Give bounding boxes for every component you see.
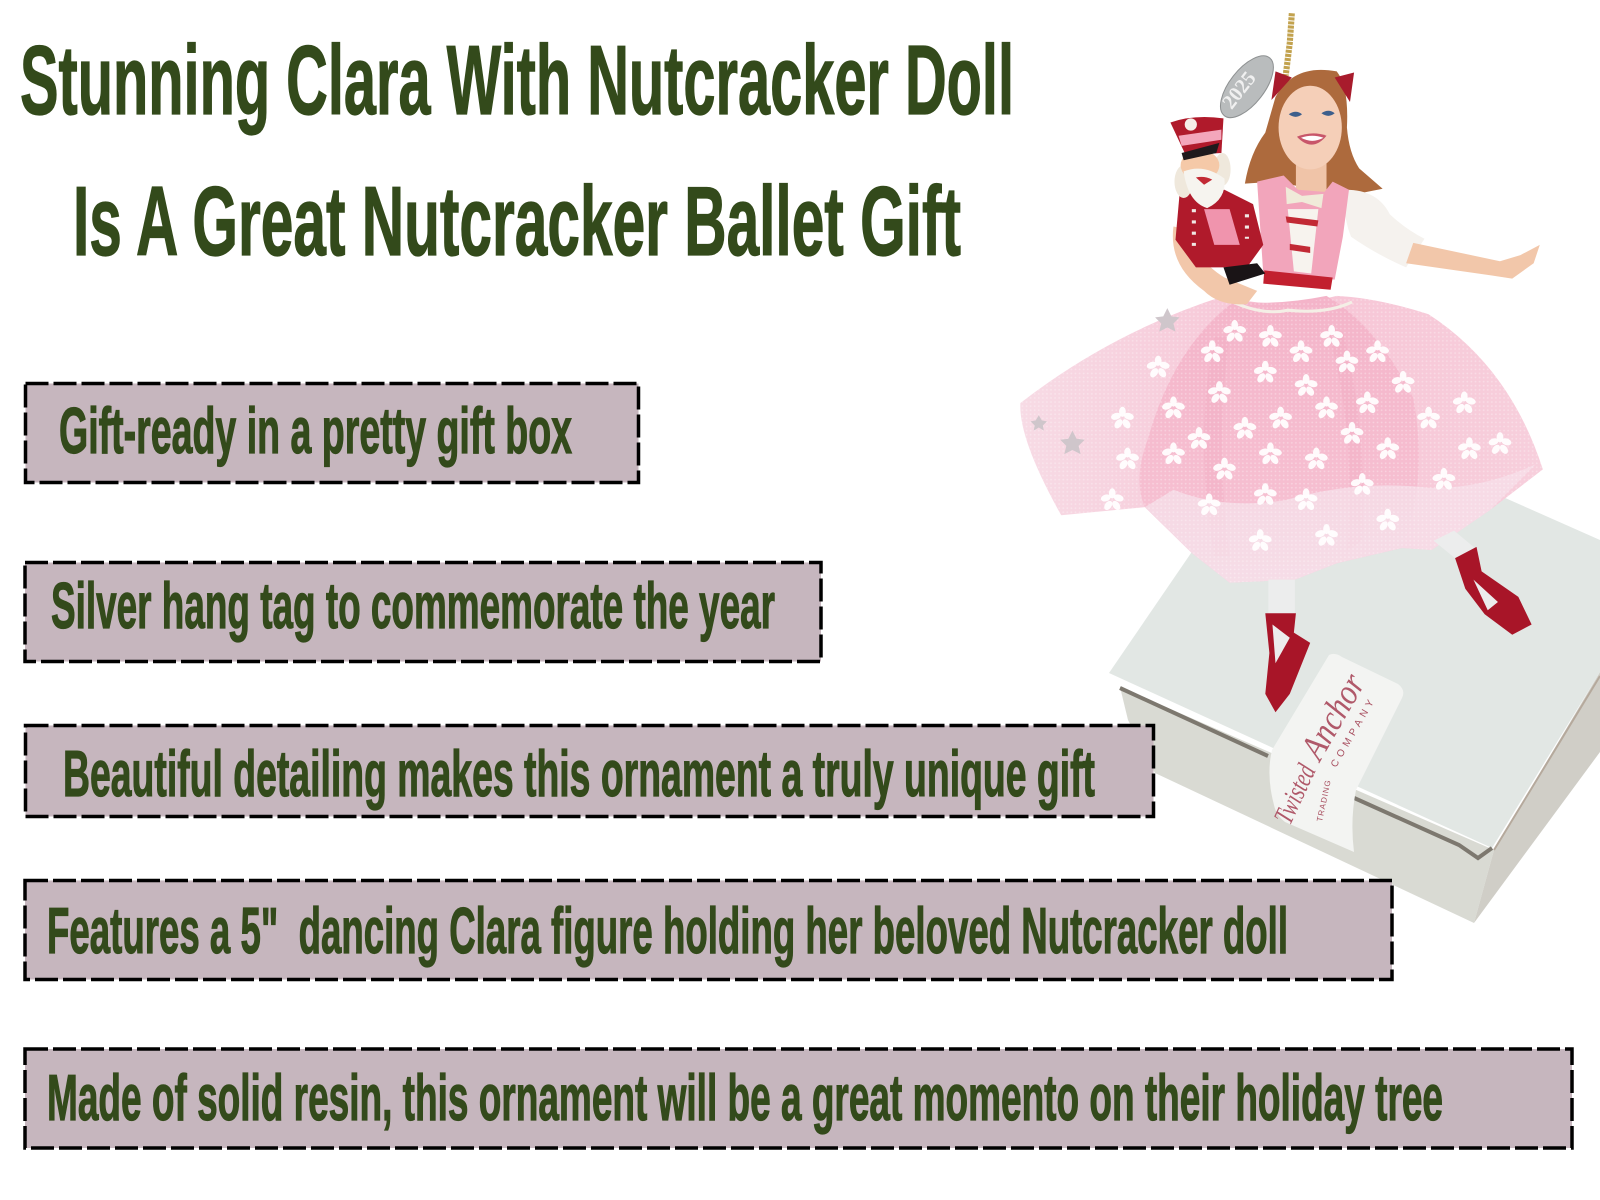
feature 3 xyxy=(26,726,1154,816)
bodice stripes xyxy=(1286,216,1318,253)
sticker brand trading: TRADING xyxy=(1315,779,1333,822)
nutcracker whiskers xyxy=(1174,165,1193,198)
face xyxy=(1279,86,1342,169)
waist belt xyxy=(1263,270,1333,290)
nutcracker chest xyxy=(1204,209,1240,245)
feature 4 xyxy=(25,880,1392,980)
holding arm xyxy=(1173,227,1257,304)
nutcracker feet xyxy=(1223,263,1265,285)
grey tulle flowers xyxy=(1031,308,1180,454)
Clara ornament xyxy=(1020,13,1543,712)
skirt outer layer xyxy=(1020,296,1543,583)
corrugated edge xyxy=(1120,688,1268,756)
sticker brand script: Anchor xyxy=(1291,666,1373,768)
gift box illustration xyxy=(1109,404,1600,923)
gift box left face xyxy=(1120,687,1494,923)
skirt inner layer xyxy=(1139,296,1419,583)
title line 2: Is A Great Nutcracker Ballet Gift xyxy=(73,166,961,276)
outstretched arm xyxy=(1406,243,1540,279)
title xyxy=(20,25,1014,276)
eyes xyxy=(1289,111,1335,117)
feature 1 xyxy=(26,384,638,482)
nutcracker hat brim xyxy=(1182,143,1219,160)
hair xyxy=(1245,70,1383,196)
nutcracker mouth xyxy=(1196,177,1212,185)
silver tag xyxy=(1211,47,1283,126)
feature 5 xyxy=(25,1049,1572,1148)
sleeve xyxy=(1345,190,1424,267)
hair bows xyxy=(1271,71,1354,102)
corrugated edge right xyxy=(1352,797,1492,858)
nutcracker face xyxy=(1181,150,1219,181)
shoe opening xyxy=(1272,624,1290,663)
shoe opening xyxy=(1473,580,1498,610)
nutcracker side hair xyxy=(1214,153,1231,186)
nutcracker doll xyxy=(1170,117,1265,285)
left ballet shoe xyxy=(1265,613,1310,712)
skirt mesh texture xyxy=(1020,296,1543,583)
bodice centre xyxy=(1288,209,1318,273)
hat plume xyxy=(1185,118,1197,131)
nutcracker beard xyxy=(1184,169,1225,208)
neck xyxy=(1296,153,1327,194)
sticker brand small: COMPANY xyxy=(1329,698,1377,770)
box right edge seam xyxy=(1494,676,1600,850)
gift box right face xyxy=(1474,672,1600,923)
right leg xyxy=(1434,531,1479,563)
hat band xyxy=(1179,130,1221,146)
teeth xyxy=(1301,136,1323,141)
bodice xyxy=(1257,176,1349,280)
tag year: 2025 xyxy=(1218,68,1261,113)
skirt folds xyxy=(1204,327,1363,556)
sticker xyxy=(1268,654,1403,852)
nutcracker hat xyxy=(1170,117,1223,155)
skirt flowers xyxy=(1100,320,1512,552)
feature 2 xyxy=(25,562,821,662)
hanging string xyxy=(1286,13,1292,76)
feature 1 text: Gift-ready in a pretty gift box xyxy=(59,394,572,467)
nutcracker buttons xyxy=(1194,209,1247,246)
collar bow xyxy=(1286,187,1323,208)
feature 2 text: Silver hang tag to commemorate the year xyxy=(51,569,775,642)
gift box top face xyxy=(1109,404,1600,848)
sticker brand script lower: Twisted xyxy=(1268,759,1323,829)
skirt mesh hem xyxy=(1061,464,1536,583)
pearl waist trim xyxy=(1224,298,1352,312)
nutcracker body xyxy=(1176,190,1263,267)
left leg xyxy=(1268,580,1295,614)
right ballet shoe xyxy=(1455,547,1532,635)
mouth xyxy=(1297,133,1327,145)
